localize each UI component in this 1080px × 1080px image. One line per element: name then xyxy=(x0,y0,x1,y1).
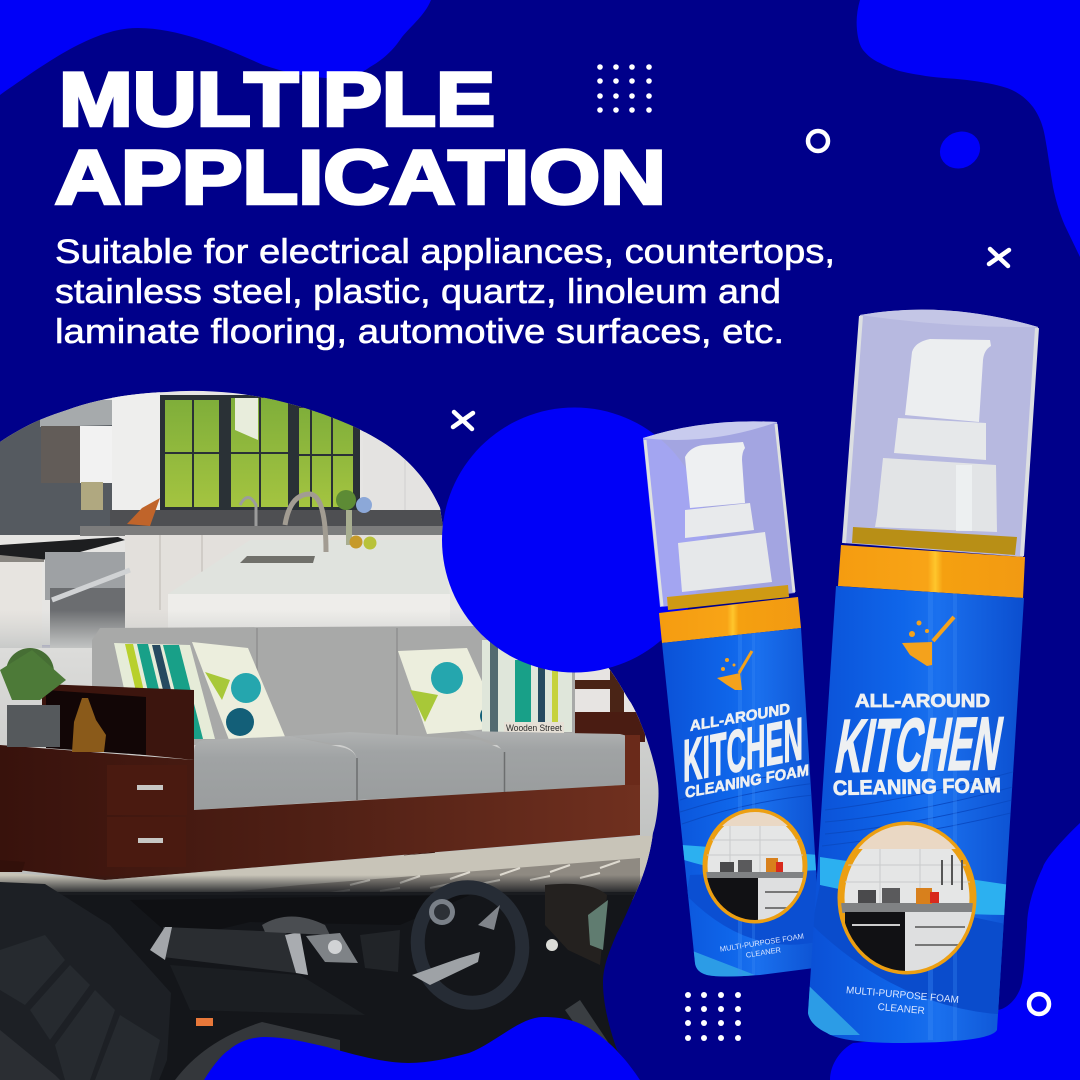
small label: CLEANING FOAM xyxy=(685,762,809,802)
gold ornament xyxy=(72,698,106,752)
small pump xyxy=(678,442,772,592)
car interior xyxy=(0,875,660,1080)
description text: Suitable for electrical appliances, countertops, xyxy=(55,233,835,271)
steering wheel xyxy=(407,877,533,1013)
sofa frame xyxy=(0,684,645,880)
small tagline: MULTI-PURPOSE FOAM xyxy=(719,932,804,954)
description text: laminate flooring, automotive surfaces, etc. xyxy=(55,313,784,351)
large gold collar xyxy=(852,527,1017,555)
small bottle: KITCHEN xyxy=(683,704,803,795)
large cap xyxy=(843,310,1038,557)
large tagline: CLEANER xyxy=(877,1002,925,1017)
striped cushion right xyxy=(482,640,572,732)
sofa seats xyxy=(194,731,638,810)
large tagline xyxy=(844,985,959,1020)
large label: ALL-AROUND xyxy=(855,691,990,711)
seat bolster xyxy=(0,882,171,1080)
rug xyxy=(234,858,640,900)
decorative dot grid top xyxy=(597,64,652,113)
title: MULTIPLE xyxy=(59,58,495,142)
cushion brand tag: Wooden Street xyxy=(506,723,562,733)
floor xyxy=(0,836,660,900)
title xyxy=(55,58,666,220)
large label xyxy=(830,691,1009,800)
floral cushion left xyxy=(192,642,286,740)
small bottle xyxy=(643,421,830,990)
small bottle cap xyxy=(643,421,795,607)
small label: ALL-AROUND xyxy=(690,700,790,735)
gear controller xyxy=(306,933,358,963)
photo collage xyxy=(0,385,660,1080)
sofa scene background xyxy=(0,648,660,898)
small label image xyxy=(700,810,810,928)
instrument cluster xyxy=(545,884,607,965)
decorative rings and crosses xyxy=(453,131,1049,1014)
plant and pot xyxy=(0,648,66,747)
large label: CLEANING FOAM xyxy=(833,774,1001,800)
large body xyxy=(800,580,1030,1050)
car door panel xyxy=(130,895,470,940)
small tagline xyxy=(719,932,806,964)
armrest console xyxy=(163,927,296,973)
kitchen scene xyxy=(0,390,474,648)
large pump xyxy=(875,339,997,532)
small tagline: CLEANER xyxy=(745,945,782,960)
large circle xyxy=(442,408,707,672)
small gold collar xyxy=(667,585,789,610)
seat centre panels xyxy=(0,935,160,1080)
small body xyxy=(662,628,817,976)
title: APPLICATION xyxy=(55,136,666,220)
decorative dot grid bottom xyxy=(685,992,741,1041)
seat light xyxy=(196,1018,213,1026)
large bottle xyxy=(800,310,1038,1050)
front seat xyxy=(175,1022,340,1080)
floral cushion right xyxy=(398,648,482,734)
description text xyxy=(55,233,835,351)
large broom icon xyxy=(902,617,954,666)
striped cushion left xyxy=(114,643,215,739)
description text: stainless steel, plastic, quartz, linoleum and xyxy=(55,273,781,311)
large label image xyxy=(840,825,975,974)
large tagline: MULTI-PURPOSE FOAM xyxy=(846,985,959,1006)
window behind sofa xyxy=(570,668,645,742)
sofa back xyxy=(92,626,575,745)
small label xyxy=(683,700,809,802)
bottom blob xyxy=(204,1017,640,1080)
small broom icon xyxy=(717,651,752,690)
